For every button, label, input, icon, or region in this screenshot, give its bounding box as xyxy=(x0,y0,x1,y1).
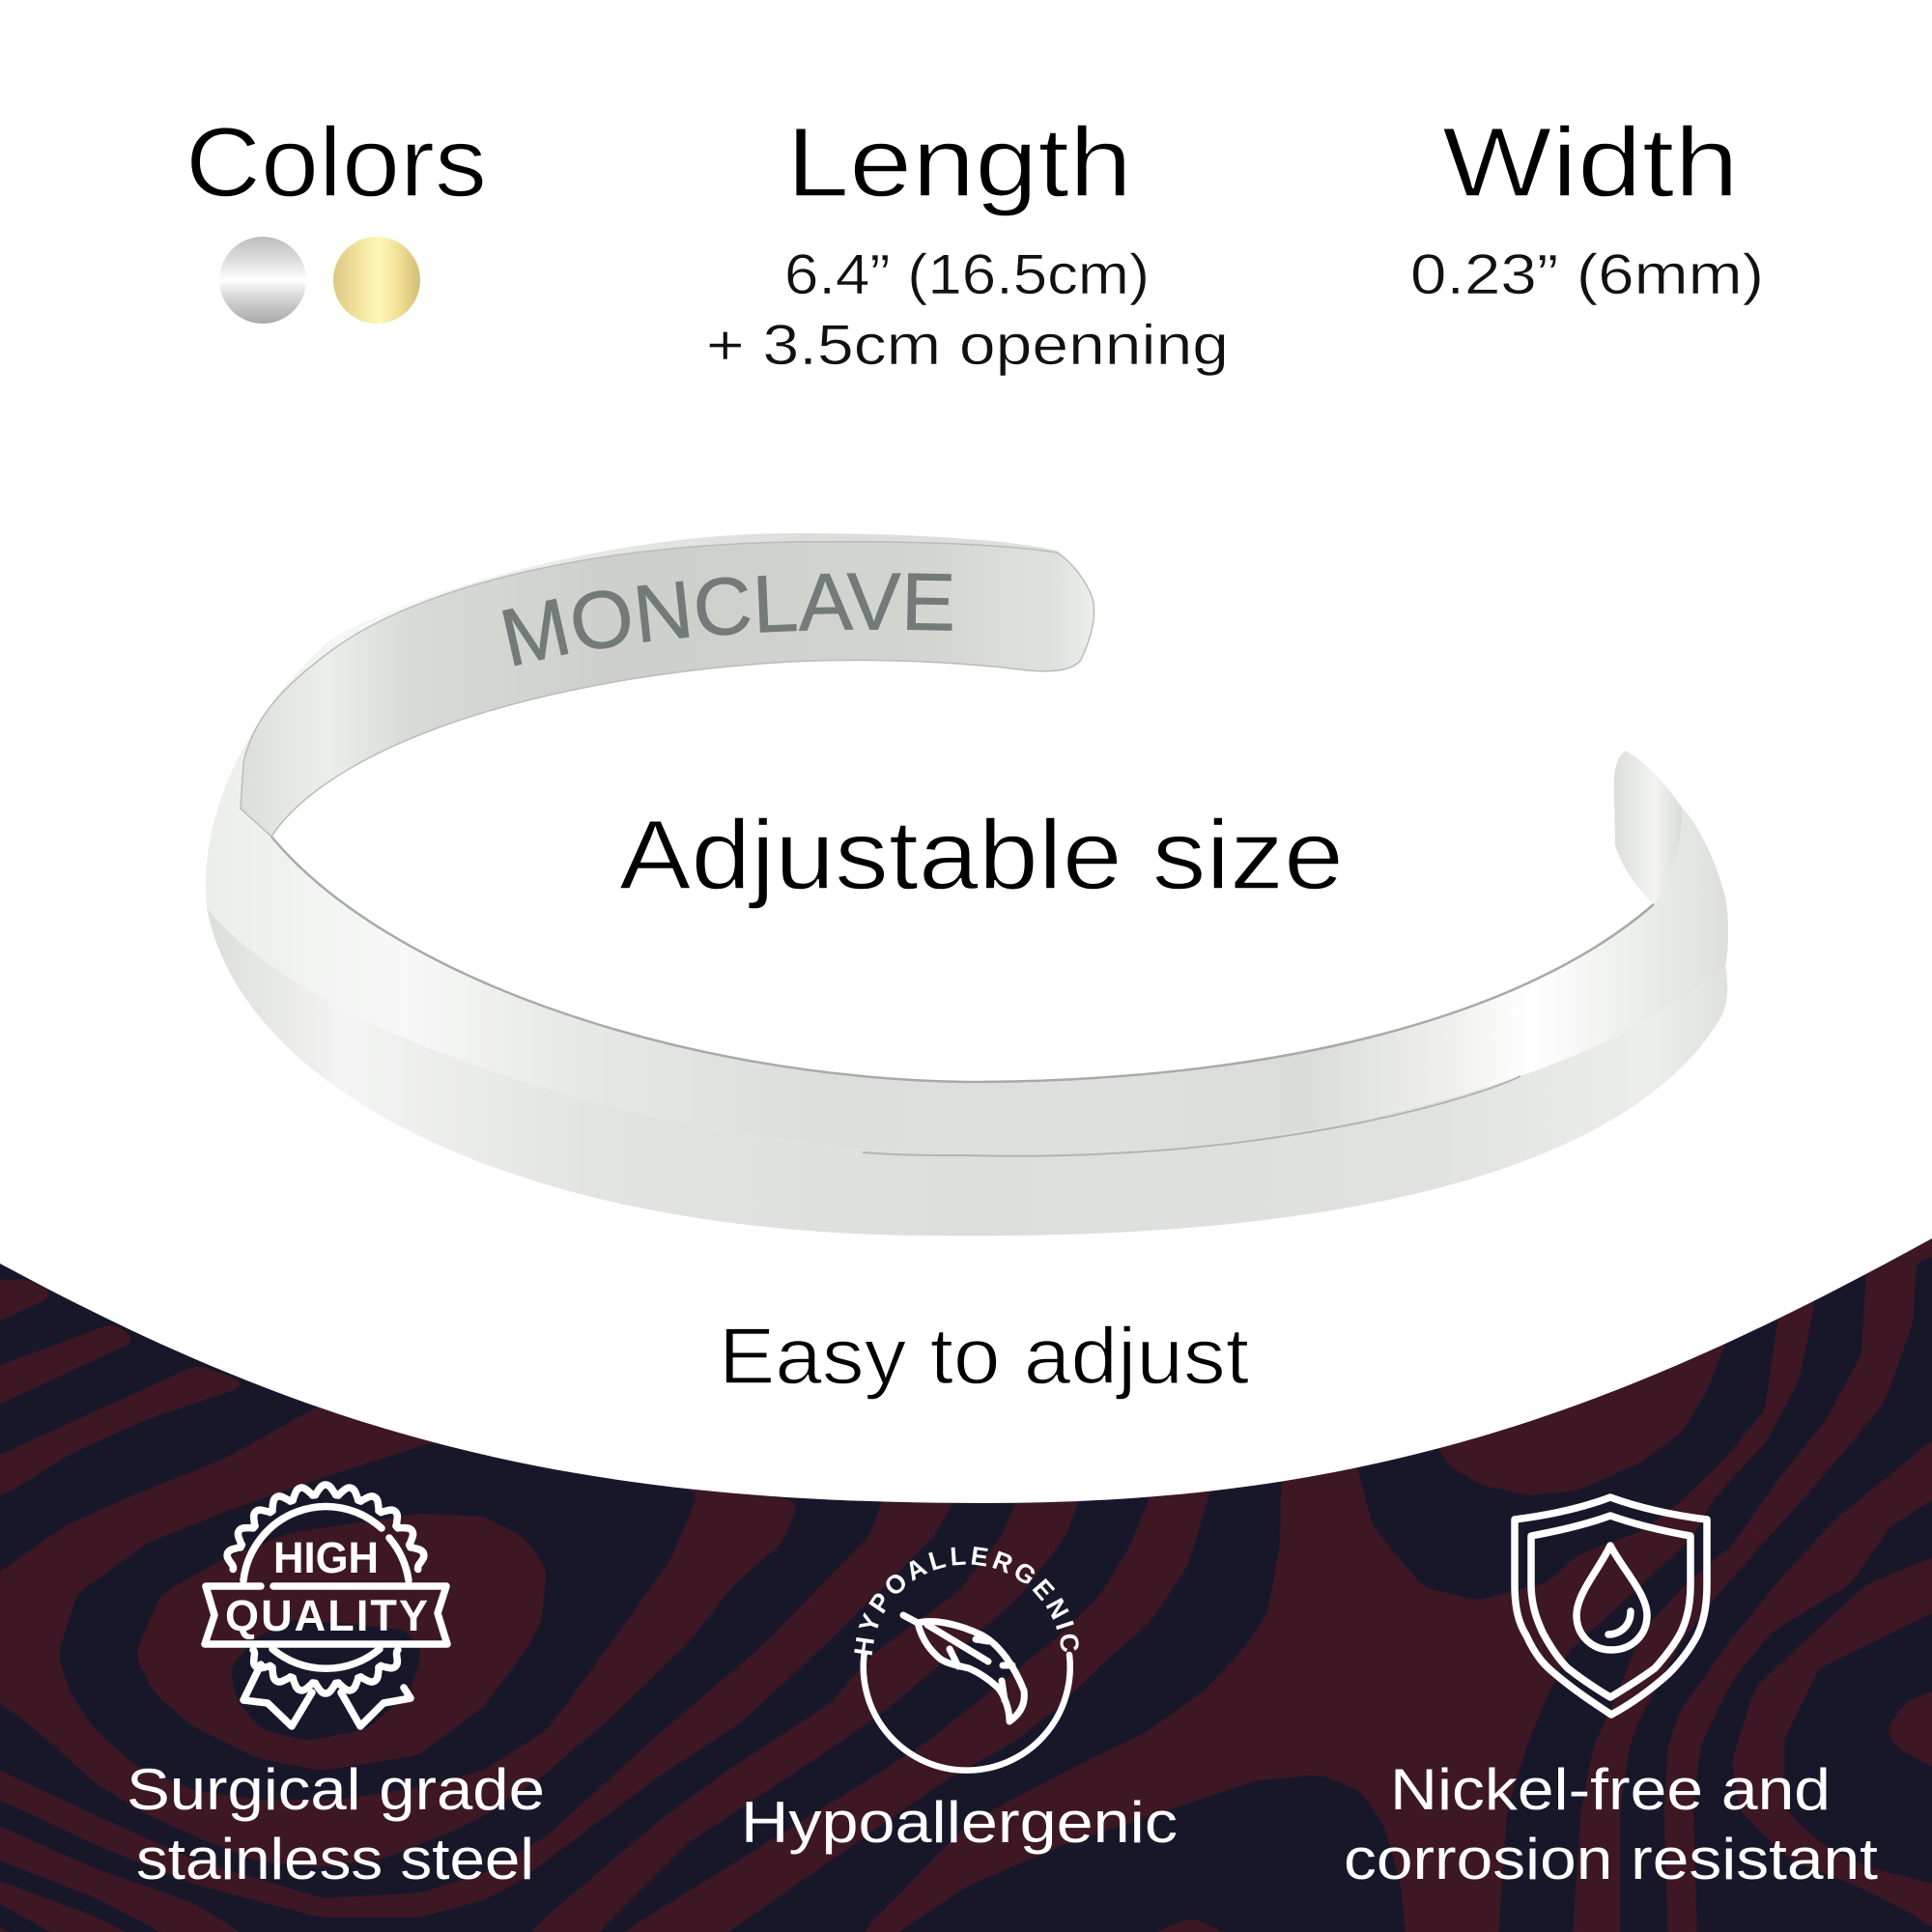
swatch: gold xyxy=(333,237,420,324)
label: nickel-free and: Nickel-free and xyxy=(1390,1757,1831,1822)
panel: white curved upper area xyxy=(0,0,1932,1503)
heading: Colors: Colors xyxy=(185,107,487,217)
icon: feather xyxy=(903,1615,1024,1721)
opening value: + 3.5cm openning xyxy=(706,314,1229,377)
column: length xyxy=(706,107,1229,377)
feature: nickel-free and corrosion resistant xyxy=(1344,1497,1878,1891)
label: stainless steel: stainless steel xyxy=(136,1827,534,1891)
icon: shield with water drop xyxy=(1515,1497,1707,1715)
badge text: HIGH: HIGH xyxy=(273,1533,379,1582)
length value: 6.4” (16.5cm) xyxy=(784,243,1150,306)
bracelet: upper rim line xyxy=(271,837,1654,1082)
bracelet: outer upper facet xyxy=(206,533,1728,1156)
heading: Length: Length xyxy=(786,107,1132,217)
feature: surgical grade stainless steel xyxy=(127,1485,545,1891)
heading: Width: Width xyxy=(1442,107,1739,217)
icon: curved seal text: HYPOALLERGENIC xyxy=(854,1547,1079,1656)
width value: 0.23” (6mm) xyxy=(1410,243,1764,306)
swatch: silver xyxy=(219,237,306,324)
badge text: QUALITY: QUALITY xyxy=(225,1591,428,1640)
bracelet: front lower facet xyxy=(207,908,1727,1236)
heading: adjustable size: Adjustable size xyxy=(619,800,1344,910)
icon: high quality badge xyxy=(205,1485,447,1726)
bracelet: right end inner face xyxy=(1614,751,1682,904)
feature: hypoallergenic xyxy=(741,1547,1178,1855)
bracelet: engraved brand name: MONCLAVE xyxy=(502,573,952,667)
column: width xyxy=(1410,107,1764,306)
bracelet: inner surface xyxy=(241,542,1094,837)
heading: easy to adjust: Easy to adjust xyxy=(719,1311,1249,1401)
column: colors xyxy=(185,107,487,324)
bracelet photo illustration xyxy=(206,533,1728,1236)
icon: hypoallergenic seal circle xyxy=(864,1655,1070,1771)
bracelet: ridge line xyxy=(863,1076,1520,1156)
label: hypoallergenic: Hypoallergenic xyxy=(741,1790,1178,1855)
panel: swirl pattern background xyxy=(0,1208,1932,1932)
label: corrosion resistant: corrosion resistant xyxy=(1344,1827,1878,1891)
label: surgical grade: Surgical grade xyxy=(127,1757,545,1822)
